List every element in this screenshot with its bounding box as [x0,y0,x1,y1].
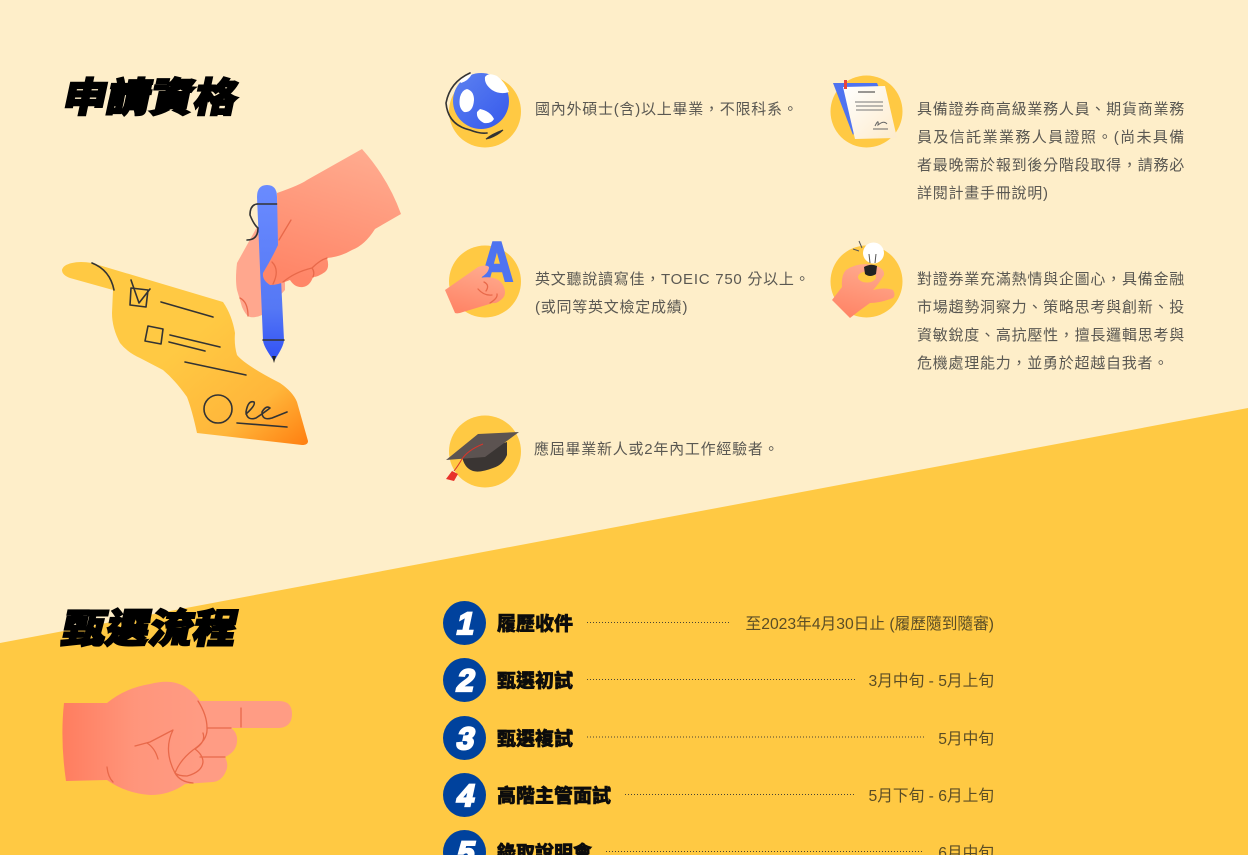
text: 應屆畢業新人或2年內工作經驗者。 [534,440,779,458]
back of hand [236,225,285,317]
middle finger [200,728,237,757]
step 3: 5月中旬 [938,730,994,748]
step 4: 5月下旬 - 6月上旬 [868,787,994,805]
item: education requirement [446,73,798,148]
form paper [62,262,308,445]
item: English requirement: (或同等英文檢定成績) [535,298,688,316]
text: 具備證券商高級業務人員、期貨商業務 [917,100,1185,118]
step 1 [443,601,994,645]
step 3: 3 [454,721,479,756]
item: personality requirement: 危機處理能力，並勇於超越自我者。 [917,355,1169,372]
item: license requirement [830,76,1185,202]
icon: graduation cap [446,416,521,488]
step 2: 2 [454,663,479,698]
heading: 申請資格: 申請資格 [59,76,243,120]
item: license requirement: 員及信託業業務人員證照。(尚未具備 [917,129,1185,146]
item: personality requirement: 市場趨勢洞察力、策略思考與創新、投 [917,298,1185,316]
illustration: hand signing a form [62,149,401,445]
icon: hand holding light bulb [830,241,902,318]
fist and cuff [62,682,207,795]
process timeline [443,601,994,855]
icon: hand holding letter A: A [481,230,513,293]
item: graduate requirement [446,416,779,488]
text: 對證券業充滿熱情與企圖心，具備金融 [917,270,1185,288]
pen [257,185,284,361]
yellow diagonal background [0,408,1248,855]
item: personality requirement: 資敏銳度、高抗壓性，擅長邏輯思考與 [917,326,1185,344]
item: license requirement: 詳閱計畫手冊說明) [917,185,1049,202]
heading: 甄選流程: 甄選流程 [58,607,242,651]
icon: document [830,76,902,148]
step 2: 甄選初試 [497,669,573,692]
text: 國內外碩士(含)以上畢業，不限科系。 [535,101,798,118]
step 5 [443,830,994,855]
item: license requirement: 者最晚需於報到後分階段取得，請務必 [917,157,1185,174]
fingers and palm [263,149,401,287]
illustration: pointing hand [62,682,292,795]
step 3 [443,716,994,760]
step 3: 甄選複試 [497,727,573,750]
step 2 [443,658,994,702]
text: 英文聽說讀寫佳，TOEIC 750 分以上。 [535,270,810,288]
item: personality requirement [830,241,1185,372]
ring finger [185,756,227,784]
step 1: 履歷收件 [497,612,573,635]
step 1: 1 [454,606,479,641]
finger lines [107,701,241,783]
index finger [195,701,292,728]
item: English requirement [445,230,810,318]
step 4 [443,773,994,817]
step 1: 至2023年4月30日止 (履歷隨到隨審) [746,615,994,633]
step 4: 4 [454,778,479,813]
step 2: 3月中旬 - 5月上旬 [868,672,994,690]
step 4: 高階主管面試 [497,784,611,807]
icon: globe [446,73,521,148]
icon: hand holding letter A [445,230,521,318]
form marks [92,263,287,427]
